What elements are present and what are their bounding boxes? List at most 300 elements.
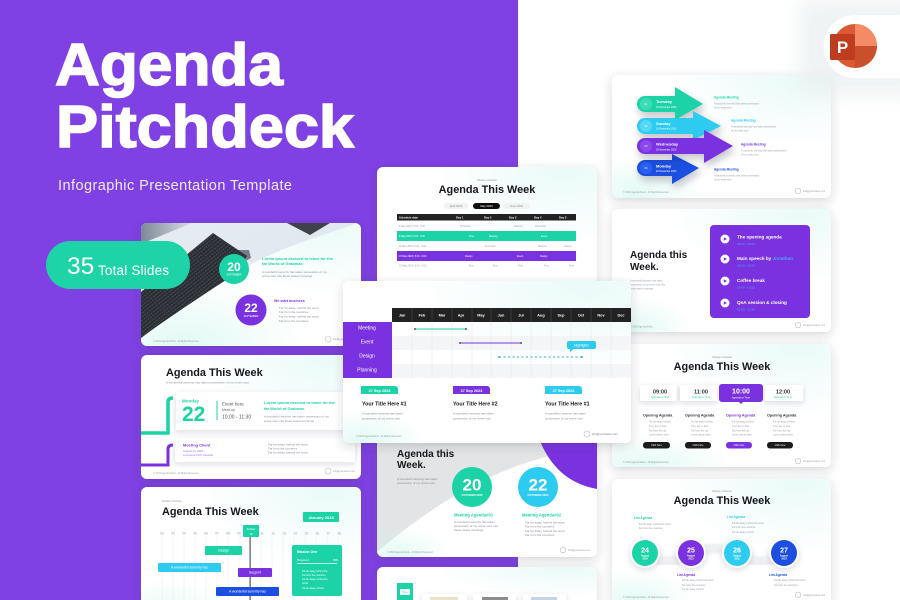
arrow notes: of my entire soul [714, 178, 732, 182]
time slots: 10:00 [732, 388, 750, 396]
list agenda notes: Far from the countries [774, 584, 798, 587]
milestone 3: Your Title Here #1 [545, 402, 590, 408]
heading: Agenda This Week [674, 495, 771, 507]
heading: Agenda This Week [166, 367, 264, 379]
today marker: 10 [249, 532, 253, 536]
list agenda notes: List Agenda [727, 515, 745, 519]
table: Free [493, 264, 499, 268]
panel: agenda list slide [612, 209, 831, 332]
date circle 22: 22 [244, 301, 258, 315]
panel: gantt slide: info@yourname.com [592, 432, 619, 436]
milestone 1: 27 Sep 2023 [369, 389, 390, 393]
panel: arrows slide: © 2023 Agenda Deck · All Rights Reserved [623, 191, 669, 194]
arrow: Sunday: 18 November 2023 [656, 128, 677, 130]
description: these sweet mornings [630, 288, 654, 290]
arrow: Monday [637, 154, 699, 184]
columns: Far far away, behind [691, 420, 713, 424]
node 25 [676, 538, 706, 568]
card: Monday 22: Lorem ipsum decided to leave for the [264, 400, 336, 405]
card: Meeting Client [141, 438, 355, 465]
day numbers and grid: 13 [282, 532, 286, 536]
milestone 3: possession of my entire soul [545, 416, 583, 420]
panel: date circles slide: possession of my entire soul [397, 481, 435, 485]
heading: Agenda This Week [439, 184, 536, 196]
panel: arrows slide: info@yourname.com [803, 190, 825, 193]
grid lines [412, 322, 611, 378]
badge: January 2023: January 2023 [308, 515, 334, 520]
card: Monday 22: far World of Grabmar. [264, 406, 305, 411]
date circle 20: SEPTEMBER [227, 274, 242, 276]
text block: teal: A wonderful serenity has taken possession of my [262, 270, 327, 274]
milestone 2 [453, 386, 498, 420]
node 24 [630, 538, 660, 568]
node 27: 2023 [781, 558, 787, 560]
columns: Opening Agenda [726, 414, 756, 418]
node 24: 2023 [642, 558, 648, 560]
badge: January 2023 [303, 512, 339, 522]
text: Meeting Agenda 02: Far from the countries [525, 533, 555, 537]
panel: agenda list slide: © 2023 Agenda Deck [630, 326, 653, 328]
columns: They live in their [691, 425, 709, 428]
arrow: Wednesday [637, 130, 733, 163]
callout: highlights [567, 341, 596, 352]
milestone 2: A wonderful serenity has taken [453, 412, 494, 416]
panel: slide with building photo: info@yourname.com [333, 338, 355, 341]
table: Promotion [460, 225, 472, 228]
table: Day 1 [456, 216, 464, 220]
table: Day 3 [509, 216, 517, 220]
text block: teal: entire soul, like these sweet mornings [262, 274, 313, 278]
text: Meeting Agenda 01: these sweet mornings [454, 528, 484, 532]
arrow: Tuesday: 15 November 2023 [656, 106, 677, 109]
bar: serenity [158, 563, 221, 572]
month header: Aug [537, 314, 545, 318]
arrow: Wednesday: 03 [645, 144, 648, 148]
month tabs: April 2023 [450, 204, 463, 208]
title: Pitchdeck [56, 94, 354, 160]
arrow notes: A wonderful serenity has taken possession [714, 174, 760, 178]
bar: serenity blue [216, 587, 279, 596]
panel: date nodes slide: Weekly schedule [712, 489, 732, 493]
circle: 20 October [452, 467, 492, 507]
date circle 20: 20 [227, 260, 241, 274]
card: Monday 22: 10:00 - 11:30 [222, 414, 251, 420]
card: mission: Far far away, behind [302, 587, 324, 590]
list agenda notes [634, 515, 806, 591]
panel: Monday schedule slide: info@yourname.com [333, 470, 355, 473]
card: mission [292, 545, 342, 596]
columns: Far far away, behind [773, 420, 795, 424]
table: Day 4 [534, 216, 542, 220]
panel: date circles slide [377, 430, 597, 557]
today marker: Friday [247, 527, 256, 531]
day numbers and grid: 08 [226, 532, 230, 536]
arrow notes: A wonderful serenity has taken possession [741, 150, 787, 152]
milestone 1: Your Title Here #1 [362, 402, 407, 408]
panel: bottom partial slide [377, 567, 597, 600]
arrow notes: Agenda Meeting [714, 168, 739, 172]
table: Design [540, 255, 548, 258]
card: mission: 58% [333, 558, 339, 562]
card: Meeting Client: Far from the countries [268, 446, 298, 450]
list agenda notes: Far far away, behind [732, 531, 754, 534]
month tabs: May 2023 [480, 204, 493, 208]
columns: Lorem ipsum dolor [732, 434, 752, 436]
month header: Apr [458, 314, 465, 318]
table: Promotion [535, 225, 547, 228]
buttons: Click here [775, 444, 786, 447]
card: Meeting Client: At Around 4.00 Tutorials [183, 453, 213, 457]
purple agenda panel: 10:30 - 11:00 [737, 308, 755, 312]
table: Meeting [489, 235, 498, 238]
columns: They live in their [732, 425, 750, 428]
table: Meeting [514, 225, 523, 228]
list agenda notes: Far far away, behind the word [682, 579, 714, 582]
table: Day 2 [484, 216, 492, 220]
arrow: Wednesday: 20 November 2023 [656, 148, 677, 152]
card: mission: Far far away, behind the [302, 578, 328, 581]
month header: May [477, 314, 486, 318]
node 25: 2023 [688, 558, 694, 560]
arrow: Tuesday: Tuesday [656, 99, 673, 104]
purple agenda panel: QnA session & closing [737, 300, 787, 305]
text: Meeting Agenda 02: Far far away, behind the word [525, 529, 565, 533]
table: Meeting [538, 245, 547, 248]
purple agenda panel: Main speech by Jonathan [737, 256, 793, 261]
description [630, 280, 666, 290]
columns: Lorem ipsum dolor [649, 434, 669, 436]
subtitle: Infographic Presentation Template [58, 178, 292, 194]
text: Meeting Agenda 02 [522, 512, 565, 537]
table: 5 May 2023 | 5:00 - 6:00 [399, 225, 426, 228]
purple agenda panel: 09:00 - 10:00 [737, 264, 755, 268]
card: Monday 22: Monday [182, 398, 199, 404]
panel: date circles slide: info@yourname.com [568, 549, 590, 552]
table [397, 214, 576, 268]
photo: office building [141, 223, 358, 338]
card: Monday 22: Meet-up [222, 408, 235, 412]
heading: Week. [630, 262, 659, 273]
card: mission: world [302, 582, 308, 585]
columns: Far from the city [732, 430, 750, 432]
heading: Agenda This Week [162, 506, 260, 518]
time slots: Agenda to Time [774, 395, 793, 399]
text: Meeting Agenda 01: A wonderful serenity has taken [454, 520, 495, 524]
milestone 1 [361, 386, 407, 420]
list agenda notes: Far far away, behind [682, 588, 704, 591]
time slots: 12:00 [776, 390, 790, 396]
row labels: Design [359, 354, 375, 360]
columns: Far from the city [649, 430, 667, 432]
panel: Monday schedule slide: © 2023 Agenda Deck · All Rights Reserved [153, 472, 199, 475]
table: Promotion [485, 245, 497, 248]
panel: Monday schedule slide [141, 355, 361, 479]
bar: serenity: A wonderful serenity has [171, 566, 208, 570]
day numbers and grid: 07 [215, 532, 219, 536]
buttons: Click here [651, 444, 662, 447]
day numbers and grid: 17 [326, 532, 330, 536]
panel: date circles slide: © 2023 Agenda Deck · All Rights Reserved [387, 551, 433, 554]
purple agenda panel [710, 225, 810, 318]
node 25: August [687, 554, 695, 558]
heading: Agenda This Week [674, 361, 771, 373]
buttons: Click here [734, 444, 745, 447]
badge: 35 total slides [46, 241, 190, 289]
circle: 22 October [518, 467, 558, 507]
purple corner shape [540, 443, 597, 489]
text block: we start business [274, 299, 319, 323]
gantt line: design [498, 356, 583, 358]
list agenda notes: List Agenda [677, 573, 695, 577]
panel: timeline slide [141, 487, 361, 600]
panel: time slots slide: Weekly schedule [712, 355, 732, 359]
description: A wonderful serenity has taken [630, 280, 663, 282]
list agenda notes: Far far away, behind the word [639, 523, 671, 526]
list agenda notes: Far from the countries [639, 527, 663, 530]
arrow: Tuesday: 01 [645, 102, 648, 106]
date circle 22 [236, 294, 266, 326]
columns: Far from the city [691, 430, 709, 432]
day numbers and grid: 12 [271, 532, 275, 536]
gantt line: meeting [414, 328, 467, 330]
table: Free [569, 264, 575, 268]
badge: 35 total slides: Total Slides [98, 263, 169, 278]
time slots: 09:00 [653, 390, 667, 396]
arrow: Sunday [637, 111, 721, 140]
text block: we start business: Far from the countries [279, 310, 309, 314]
card: Monday 22: entire soul, like these sweet mornings [264, 419, 315, 423]
teal tag: Plug [402, 590, 408, 594]
day numbers and grid: 05 [193, 532, 197, 536]
milestone 2: 27 Sep 2023 [461, 389, 482, 393]
list agenda notes: Far from the countries [732, 526, 756, 529]
icon: PowerPoint: P [837, 38, 848, 57]
card: Meeting Client: Far far away, behind the word [268, 442, 308, 446]
text block: we start business: Far far away, behind the word [279, 314, 319, 318]
day numbers and grid: 16 [315, 532, 319, 536]
table: 8 May 2023 | 5:00 - 6:00 [399, 235, 426, 238]
node 26: 2023 [734, 558, 740, 560]
table: 11 May 2023 | 5:00 - 6:00 [399, 245, 427, 248]
table: Event [517, 255, 523, 258]
badge: 35 total slides: 35 [67, 253, 94, 280]
panel: time slots slide: info@yourname.com [803, 460, 825, 463]
month header: Jun [498, 314, 505, 318]
text block: teal [262, 256, 334, 278]
day numbers and grid: 04 [182, 532, 186, 536]
day numbers and grid [160, 532, 341, 600]
circle: 22 October: 22 [529, 476, 547, 494]
day numbers and grid: 14 [293, 532, 297, 536]
row labels: Planning [357, 368, 377, 374]
arrow notes: Agenda Meeting [731, 118, 756, 122]
bar: Design [205, 546, 242, 555]
card: Monday 22: 22 [182, 403, 205, 426]
callout: highlights: Highlights [574, 344, 589, 348]
node 24: August [641, 554, 649, 558]
card: Monday 22: Event here [222, 402, 244, 406]
month header: Jul [518, 314, 524, 318]
bar: serenity blue: A wonderful serenity has [229, 590, 266, 594]
text: Meeting Agenda 02: Far far away, behind the word [525, 520, 565, 524]
row labels [343, 322, 392, 378]
node 26 [722, 538, 752, 568]
buttons: Click here [693, 444, 704, 447]
table: Design [564, 245, 572, 248]
table: 15 May 2023 | 5:00 - 6:00 [399, 255, 427, 258]
bar: Support: Support [249, 570, 261, 574]
arrow: Wednesday: Wednesday [656, 142, 679, 146]
panel: timeline slide: Weekly schedule [162, 499, 182, 503]
text: Meeting Agenda 02: Far from the countries [525, 524, 555, 528]
panel: slide with building photo [141, 223, 361, 346]
month header: Oct [578, 314, 585, 318]
circle: 22 October: OCTOBER 2023 [528, 493, 549, 497]
arrow: Sunday: Sunday [656, 121, 671, 126]
columns [643, 414, 797, 436]
card: Meeting Client: Meeting Client [183, 442, 211, 448]
circle: 20 October: 20 [463, 476, 481, 494]
columns: Lorem ipsum dolor [773, 434, 793, 436]
day numbers and grid: 15 [304, 532, 308, 536]
arrow notes: of my entire soul [741, 154, 759, 156]
milestone 2: possession of my entire soul [453, 416, 491, 420]
milestone 3 [545, 386, 590, 420]
purple agenda panel: 10:00 - 10:30 [737, 286, 755, 290]
node 26: August [733, 554, 741, 558]
day numbers and grid: 18 [337, 532, 341, 536]
time slots: Agenda to Time [692, 395, 711, 399]
table: Design [465, 255, 473, 258]
description: possession of my entire soul, like [630, 284, 666, 286]
panel: date nodes slide [612, 479, 831, 600]
date circle 20 [219, 254, 249, 284]
text block: teal: far World of Grabmar. [262, 261, 303, 266]
panel: date nodes slide: info@yourname.com [803, 594, 825, 597]
table: Free [544, 264, 550, 268]
arrow: Tuesday [637, 87, 703, 120]
table: Schedule date [399, 216, 418, 220]
arrow: Sunday: 02 [645, 124, 648, 128]
table: Event [541, 235, 547, 238]
node 27: 27 [780, 548, 788, 554]
month header: Jan [399, 314, 406, 318]
card: mission: Far from the countries [302, 574, 326, 577]
icon: PowerPoint [800, 0, 900, 95]
arrow: Monday: 04 [645, 166, 648, 170]
columns: Far from the city [773, 430, 791, 432]
text: Meeting Agenda 01 [454, 512, 498, 532]
day numbers and grid: 02 [160, 532, 164, 536]
milestone 3: A wonderful serenity has taken [545, 412, 586, 416]
list agenda notes: List Agenda [634, 516, 652, 520]
columns: Opening Agenda [767, 414, 797, 418]
row bands [392, 336, 631, 378]
columns: They live in their [649, 425, 667, 428]
columns: Opening Agenda [643, 414, 673, 418]
month tabs [444, 203, 530, 209]
time slots: Agenda to Time [651, 395, 670, 399]
photo cards [422, 594, 566, 600]
month tabs: June 2023 [510, 204, 523, 208]
card: mission: Mission One [297, 550, 317, 554]
time slots: Agenda to Time [732, 396, 751, 400]
node 27 [769, 538, 799, 568]
panel: time slots slide: © 2023 Agenda Deck · All Rights Reserved [623, 461, 669, 464]
columns: Opening Agenda [685, 414, 715, 418]
month header: Sep [558, 314, 565, 318]
panel: arrows slide [612, 75, 831, 198]
panel: date nodes slide: © 2023 Agenda Deck · All Rights Reserved [623, 596, 669, 599]
arrow notes: Agenda Meeting [714, 96, 739, 100]
month header: Dec [618, 314, 624, 318]
panel: Monday schedule slide: A wonderful serenity has taken possession of my entire soul [166, 380, 249, 384]
bar: Design: Design [218, 548, 229, 552]
columns: Far far away, behind [649, 420, 671, 424]
table: Free [469, 235, 475, 238]
text block: we start business: Far far away, behind the word [279, 306, 319, 310]
day numbers and grid: 06 [204, 532, 208, 536]
columns: Far far away, behind [732, 420, 754, 424]
list agenda notes: List Agenda [769, 573, 787, 577]
time slots [640, 384, 803, 404]
panel: slide with building photo: © 2023 Agenda Deck · All Rights Reserved [153, 340, 199, 343]
card: Monday 22: A wonderful serenity has taken possession of my [264, 414, 329, 418]
columns: Lorem ipsum dolor [691, 434, 711, 436]
heading: Agenda this [397, 449, 455, 460]
node 25: 25 [687, 548, 695, 554]
table: 19 May 2023 | 5:00 - 6:00 [399, 264, 427, 268]
arrow: Monday: 22 November 2023 [656, 170, 677, 173]
text block: we start business: Far from the countries [279, 319, 309, 323]
bar: Support [238, 568, 272, 577]
row labels: Event [361, 340, 374, 346]
circle: 20 October: OCTOBER 2023 [462, 493, 483, 497]
panel: schedule table slide: Weekly schedule [477, 178, 497, 182]
table: Day 5 [559, 216, 567, 220]
node connector [645, 546, 784, 560]
card: Monday 22 [141, 392, 356, 433]
arrow notes: Agenda Meeting [741, 142, 766, 146]
milestone 1: possession of my entire soul [362, 416, 400, 420]
text: Meeting Agenda 01: Meeting Agenda#01 [454, 512, 494, 518]
purple agenda panel: The opening agenda [737, 234, 782, 240]
card: mission: Far far away, behind the [302, 570, 328, 573]
table: Free [469, 264, 475, 268]
milestone 1: A wonderful serenity has taken [362, 412, 403, 416]
time slots: 11:00 [694, 390, 708, 396]
heading: Week. [397, 460, 426, 471]
text block: teal: Lorem ipsum decided to leave for the [262, 256, 334, 261]
arrow: Monday: Monday [656, 164, 672, 168]
day numbers and grid: 03 [171, 532, 175, 536]
text: Meeting Agenda 02: Meeting Agenda#02 [522, 512, 562, 518]
date circle 22: SEPTEMBER [244, 315, 259, 318]
panel: time slots slide [612, 344, 831, 467]
panel: agenda list slide: info@yourname.com [803, 324, 825, 327]
node 26: 26 [733, 548, 741, 554]
list agenda notes: Far far away, behind the word [732, 522, 764, 525]
buttons [643, 442, 793, 448]
arrow notes: A wonderful serenity has taken possession [731, 126, 777, 128]
panel: gantt slide: © 2023 Agenda Deck · All Rights Reserved [356, 435, 402, 438]
milestone 3: 27 Sep 2023 [553, 389, 574, 393]
text block: we start business: We start business [274, 299, 305, 303]
list agenda notes: Far from the countries [682, 584, 706, 587]
gantt line: event [459, 342, 522, 344]
heading: Agenda this [630, 250, 688, 261]
arrow notes [714, 96, 787, 182]
